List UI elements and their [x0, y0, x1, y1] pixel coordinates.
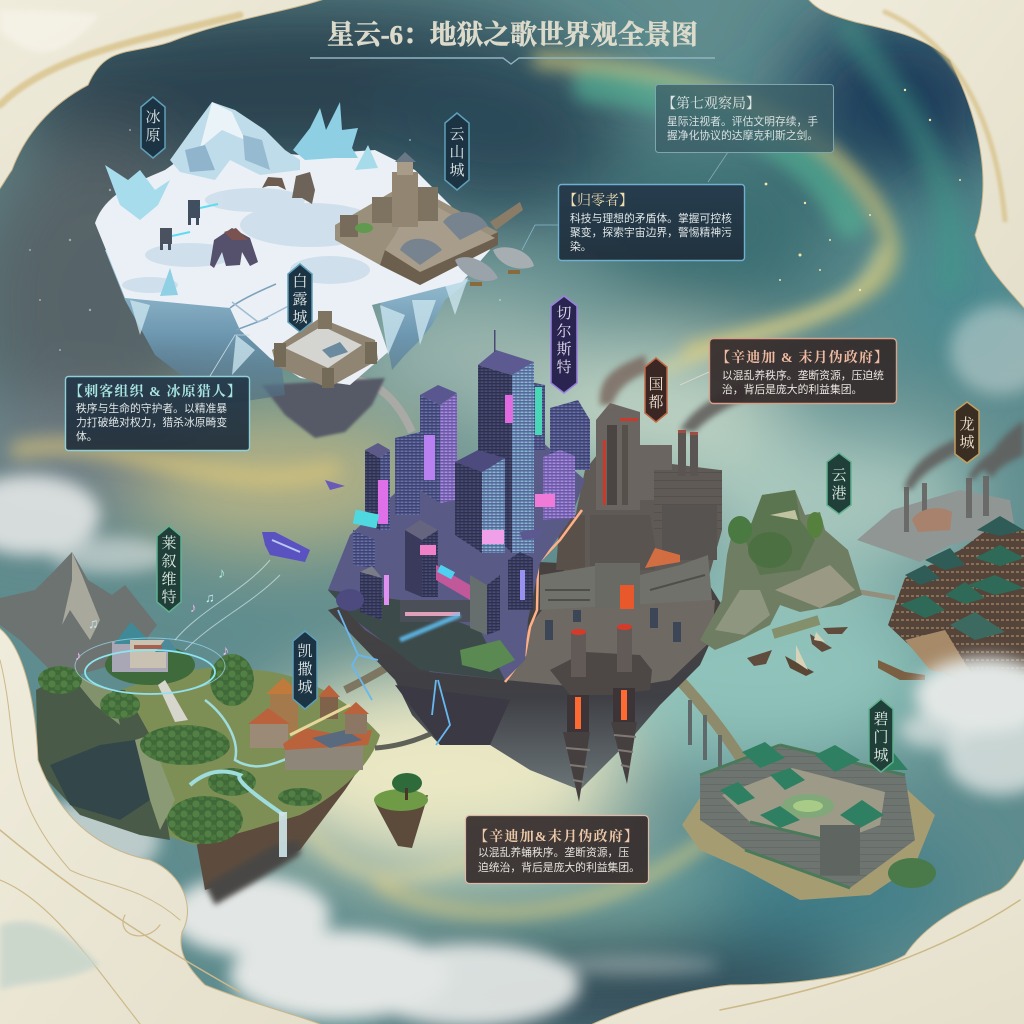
- callout: 第七观察局: 星际注视者。评估文明存续，手: [667, 114, 818, 128]
- factory smoke: [904, 420, 1024, 490]
- temple and song ring: ♫: [88, 615, 98, 631]
- far towers: [395, 432, 420, 515]
- label: 白露城: 城: [292, 309, 308, 326]
- smoke: [600, 355, 748, 432]
- pagoda town: dragon city: [878, 516, 1024, 690]
- temple and song ring: [75, 560, 280, 722]
- underside rock: [262, 378, 385, 438]
- callout: 刺客组织 & 冰原猎人: 秩序与生命的守护者。以精准暴: [76, 401, 227, 415]
- mechs: [545, 608, 681, 642]
- mountains: [0, 552, 175, 840]
- callout: 辛迪加&末月伪政府 (bottom): 【辛迪加&末月伪政府】: [474, 828, 638, 845]
- ice cliffs: [105, 250, 470, 405]
- small floating island: [374, 773, 428, 848]
- heart tower: [455, 462, 482, 553]
- label: 凯撒城: [293, 631, 317, 709]
- label: 云山城: 山: [449, 144, 465, 161]
- rock underside: [328, 560, 725, 790]
- left towers: [365, 450, 380, 530]
- temple and song ring: ♪: [75, 648, 82, 663]
- creatures and hunters: [160, 172, 315, 268]
- label: 切尔斯特: 斯: [556, 341, 572, 358]
- title: [310, 20, 715, 64]
- label: 凯撒城: 城: [297, 679, 313, 696]
- callout: 辛迪加&末月伪政府 (bottom): [466, 816, 648, 884]
- callout: 归零者: 【归零者】: [563, 192, 633, 209]
- ice peaks: [105, 102, 378, 296]
- label: 白露城: 露: [292, 291, 308, 308]
- 云山城 fortress: [335, 152, 523, 285]
- aurora bands: [20, 30, 951, 913]
- callout: 归零者: [522, 184, 744, 260]
- front towers: [405, 530, 422, 597]
- label: 碧门城: 城: [873, 747, 889, 764]
- label: 白露城: 白: [292, 273, 308, 290]
- tower with purple sign: [420, 395, 440, 503]
- temple and song ring: ♪: [218, 565, 226, 582]
- glowing border crack: [505, 510, 582, 682]
- label: 莱叙维特: 叙: [161, 553, 177, 570]
- temple and song ring: ♪: [190, 600, 196, 615]
- 白露城 fort: [272, 311, 378, 388]
- callout: 辛迪加 & 末月伪政府 (top): 【辛迪加 & 末月伪政府】: [716, 349, 888, 366]
- drills: [550, 624, 652, 802]
- label: 莱叙维特: 维: [161, 571, 177, 588]
- valley land: [120, 667, 380, 845]
- right towers: [543, 450, 575, 520]
- callout: 第七观察局: [656, 84, 834, 182]
- callout: 第七观察局: 握净化协议的达摩克利斯之剑。: [667, 128, 818, 142]
- fortress ground: [505, 600, 715, 690]
- Chelst cyberpunk city: [328, 330, 590, 680]
- label: 龙城: 城: [959, 434, 975, 451]
- temple and song ring: ♫: [205, 590, 215, 605]
- label: 云港: [827, 453, 851, 514]
- bridges: [345, 380, 895, 770]
- label: 国都: 国: [648, 376, 664, 393]
- callout: 刺客组织 & 冰原猎人: 【刺客组织 & 冰原猎人】: [69, 383, 241, 400]
- central floating island: [262, 330, 748, 802]
- stars: [765, 89, 961, 291]
- clouds: mid and lower fog: [0, 305, 1024, 1024]
- label: 碧门城: 碧: [873, 711, 889, 728]
- label: 云港: 港: [831, 485, 847, 502]
- label: 云港: 云: [831, 467, 847, 484]
- map labels: [141, 97, 979, 772]
- label: 切尔斯特: 特: [556, 359, 572, 376]
- callout: 辛迪加 & 末月伪政府 (top): 治，背后是庞大的利益集团。: [722, 382, 862, 396]
- label: 切尔斯特: 尔: [556, 323, 572, 340]
- label: 碧门城: [869, 699, 893, 772]
- label: 龙城: 龙: [959, 416, 975, 433]
- forests: [38, 654, 322, 844]
- label: 冰原: 冰: [145, 109, 161, 126]
- far factory town: [857, 420, 1024, 562]
- callout: 辛迪加 & 末月伪政府 (top): 以混乱养秩序。垄断资源，压迫统: [722, 368, 884, 382]
- island cliff: [195, 745, 375, 890]
- callout: 辛迪加&末月伪政府 (bottom): 以混乱养蛹秩序。垄断资源，压: [478, 845, 629, 859]
- floating ice island: [95, 102, 534, 438]
- label: 切尔斯特: [551, 296, 577, 393]
- fortress wall: [540, 555, 712, 610]
- label: 碧门城: 门: [873, 729, 889, 746]
- label: 云山城: 城: [449, 162, 465, 179]
- label: 云山城: [445, 113, 469, 190]
- label: 云山城: 云: [449, 126, 465, 143]
- label: 凯撒城: 撒: [297, 661, 313, 678]
- callout: 刺客组织 & 冰原猎人: 力打破绝对权力，猎杀冰原畸变: [76, 415, 227, 429]
- callout: 归零者: 聚变，探索宇宙边界，警惕精神污: [570, 225, 732, 239]
- green ruins: cloud harbor: [700, 490, 862, 650]
- 凯撒城 village: [248, 678, 372, 770]
- snow top: [95, 145, 490, 385]
- label: 国都: 都: [648, 394, 664, 411]
- callout: 第七观察局: 【第七观察局】: [662, 96, 760, 112]
- title: 星云-6：地狱之歌世界观全景图: [327, 20, 698, 50]
- label: 冰原: 原: [145, 127, 161, 144]
- boats: [747, 627, 848, 676]
- label: 国都: [645, 358, 667, 422]
- temple and song ring: ♪: [222, 642, 229, 658]
- callout: 辛迪加&末月伪政府 (bottom): 迫统治，背后是庞大的利益集团。: [478, 860, 640, 874]
- label: 莱叙维特: 莱: [161, 534, 177, 552]
- callout: 刺客组织 & 冰原猎人: [66, 335, 250, 450]
- callout: 归零者: 科技与理想的矛盾体。掌握可控核: [570, 211, 732, 225]
- label: 龙城: [955, 402, 979, 463]
- snow flecks: [29, 129, 501, 351]
- label: 冰原: [141, 97, 165, 158]
- callout: 归零者: 染。: [570, 239, 592, 253]
- label: 莱叙维特: [157, 526, 181, 612]
- capital: dark fortress: [540, 403, 722, 642]
- frame inner pale band: [0, 921, 100, 990]
- callout: 辛迪加 & 末月伪政府 (top): [680, 338, 896, 404]
- lower right fog: [900, 657, 1024, 795]
- floating island: lower left mountains and valley: [0, 552, 380, 905]
- airships: [455, 247, 534, 286]
- callout: 刺客组织 & 冰原猎人: 体。: [76, 429, 98, 443]
- label: 白露城: [288, 264, 312, 332]
- main tower: [478, 365, 512, 553]
- fortified island: Bimen city: [682, 742, 936, 900]
- label: 莱叙维特: 特: [161, 589, 177, 606]
- label: 切尔斯特: 切: [556, 305, 572, 322]
- label: 凯撒城: 凯: [297, 643, 313, 660]
- ships: [262, 480, 543, 562]
